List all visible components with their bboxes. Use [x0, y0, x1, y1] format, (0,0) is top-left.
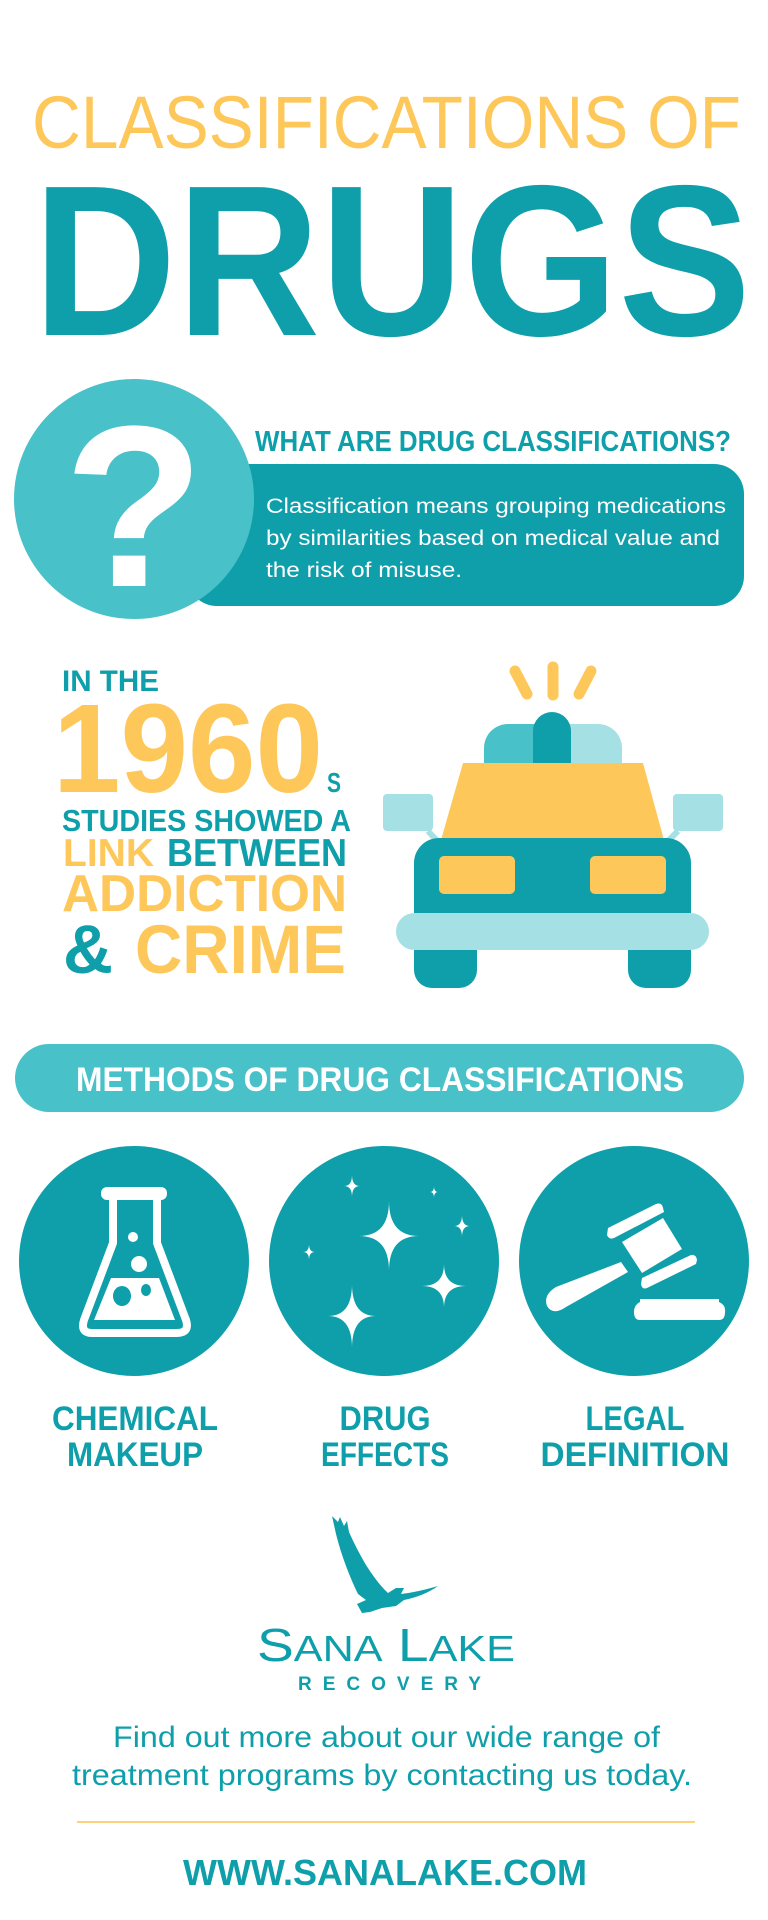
body text — [266, 495, 726, 582]
icon: police car — [383, 667, 723, 988]
logo: sana lake recovery: SANA LAKE — [257, 1619, 515, 1671]
call to action text: Find out more about our wide range of — [113, 1721, 661, 1754]
label: drug effects — [321, 1400, 449, 1474]
section banner: methods: METHODS OF DRUG CLASSIFICATIONS — [76, 1061, 684, 1099]
label: chemical makeup: CHEMICAL — [52, 1400, 218, 1438]
panel: 1960s statistic: ADDICTION — [62, 865, 347, 923]
panel: 1960s statistic: 1960 — [53, 678, 323, 819]
icon: gavel circle — [519, 1146, 749, 1376]
panel: 1960s statistic: S — [327, 767, 341, 798]
panel: 1960s statistic — [53, 665, 351, 988]
panel: what are drug classifications — [14, 378, 744, 635]
call to action text: treatment programs by contacting us today. — [72, 1759, 692, 1792]
logo: eagle — [332, 1516, 438, 1613]
panel: 1960s statistic: & — [63, 911, 113, 988]
label: legal definition — [540, 1400, 730, 1474]
icon: chemical flask circle — [19, 1146, 249, 1376]
label: chemical makeup — [52, 1400, 218, 1474]
body text: Classification means grouping medications — [266, 495, 726, 518]
logo: sana lake recovery — [257, 1619, 515, 1695]
label: chemical makeup: MAKEUP — [67, 1436, 203, 1474]
label: legal definition: LEGAL — [586, 1400, 684, 1438]
text box background — [187, 464, 744, 606]
call to action text — [72, 1721, 692, 1792]
logo: sana lake recovery: RECOVERY — [298, 1674, 492, 1695]
label: legal definition: DEFINITION — [540, 1436, 730, 1474]
section banner: methods — [15, 1044, 744, 1112]
label: drug effects: EFFECTS — [321, 1436, 449, 1474]
body text: by similarities based on medical value and — [266, 527, 720, 550]
label: drug effects: DRUG — [340, 1400, 430, 1438]
icon: question mark circle: ? — [64, 378, 204, 635]
icon: sparkles circle — [269, 1146, 499, 1376]
panel: 1960s statistic: IN THE — [62, 665, 159, 698]
panel: 1960s statistic: STUDIES SHOWED A — [62, 803, 351, 838]
website url: WWW.SANALAKE.COM — [183, 1852, 587, 1893]
icon: question mark circle — [14, 378, 254, 635]
body text: the risk of misuse. — [266, 559, 462, 582]
panel: 1960s statistic: BETWEEN — [167, 832, 347, 875]
panel: 1960s statistic: CRIME — [135, 911, 346, 988]
panel: 1960s statistic: LINK — [63, 832, 154, 875]
